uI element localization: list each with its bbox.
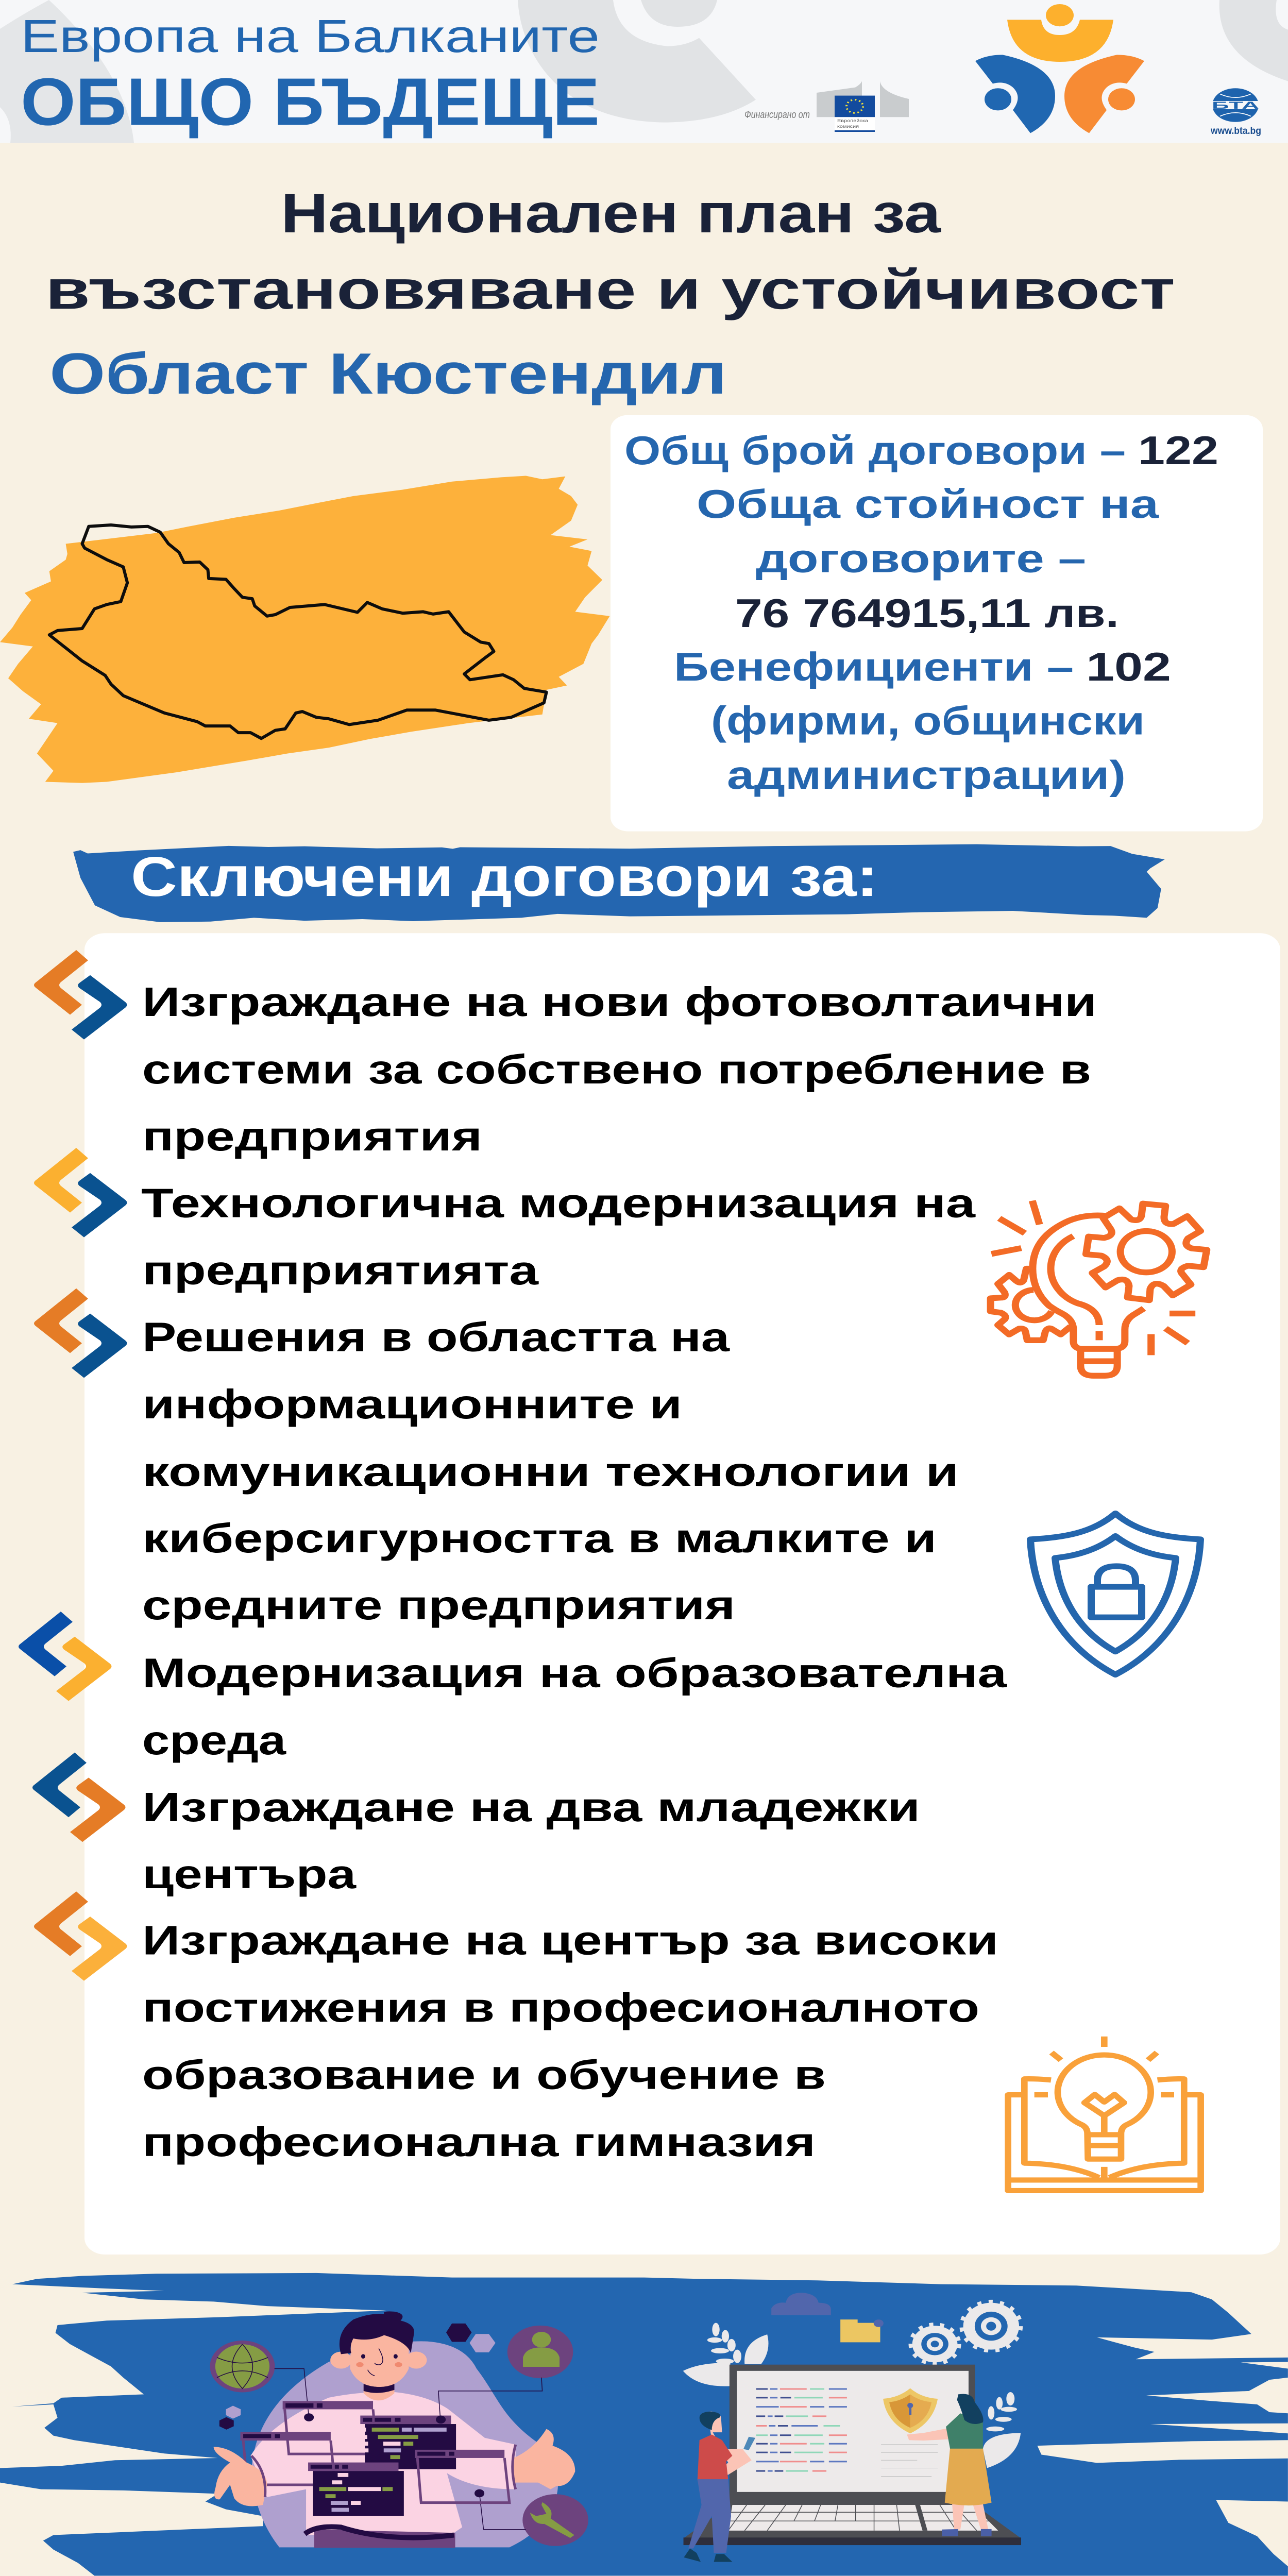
icon: book with lightbulb — [1008, 2037, 1201, 2191]
illustration: laptop security scene — [683, 2293, 1021, 2562]
stat: total value: Обща стойност на — [697, 481, 1159, 527]
logo: European Commission: Европейска — [837, 118, 869, 123]
yellow brush stroke with region map — [0, 476, 609, 783]
folder — [840, 2319, 884, 2342]
wrench node — [474, 2489, 588, 2546]
bullet icon 2 — [34, 1148, 127, 1238]
list item: ICT and cybersecurity: информационните и — [142, 1381, 682, 1427]
bullet icon 4 — [19, 1612, 111, 1701]
stat: total value: 76 764915,11 лв. — [735, 590, 1119, 636]
main title: Национален план за — [281, 182, 941, 244]
stat: beneficiaries — [674, 644, 1171, 798]
stat: total contracts: 122 — [1138, 428, 1218, 473]
window 4 — [308, 2463, 404, 2516]
bullet icon 6 — [34, 1891, 127, 1981]
list item: centre of excellence: професионална гимназия — [142, 2119, 816, 2165]
panel: contracts list — [19, 933, 1280, 2255]
stat: total contracts: Общ брой договори – — [624, 428, 1126, 473]
list item: centre of excellence: Изграждане на център за високи — [142, 1918, 998, 1963]
section banner: Сключени договори за: — [131, 846, 878, 908]
leaves — [683, 2323, 1021, 2468]
logo: European Commission: Финансирано от — [744, 109, 810, 120]
logo: European Commission — [744, 81, 909, 132]
list item: educational environment: Модернизация на образователна — [142, 1650, 1007, 1696]
region subtitle: Област Кюстендил — [49, 341, 727, 406]
main title: възстановяване и устойчивост — [45, 258, 1175, 320]
logo: BTA — [1210, 88, 1261, 136]
logo: three figures — [975, 4, 1144, 133]
list item: photovoltaic systems: системи за собствено потребление в — [142, 1047, 1091, 1093]
stat: beneficiaries: (фирми, общински — [711, 698, 1145, 743]
stat: beneficiaries: 102 — [1086, 644, 1171, 689]
shield on screen — [883, 2388, 938, 2433]
stat: beneficiaries: администрации) — [727, 753, 1126, 798]
laptop — [684, 2365, 1021, 2545]
main title — [45, 182, 1175, 320]
list item: youth centres — [142, 1785, 920, 1897]
list item: youth centres: Изграждане на два младежки — [142, 1785, 920, 1831]
stat: total value: договорите – — [756, 536, 1086, 581]
blue brush background — [0, 2273, 1288, 2575]
list item: ICT and cybersecurity: комуникационни технологии и — [142, 1449, 959, 1495]
globe node — [210, 2341, 309, 2418]
window 2 — [360, 2416, 456, 2469]
list item: centre of excellence: постижения в професионалното — [142, 1985, 979, 2031]
head and hair — [330, 2311, 427, 2400]
logo: European Commission: комисия — [837, 124, 859, 129]
list item: centre of excellence — [142, 1918, 998, 2165]
man with phone — [684, 2412, 755, 2562]
window 1 — [283, 2401, 377, 2454]
map outline — [49, 525, 547, 738]
icon: lightbulb with gears — [991, 1201, 1207, 1376]
header title: Europe on the Balkans: Европа на Балканите — [21, 10, 600, 62]
panel: contract statistics — [611, 415, 1263, 832]
sweater — [250, 2392, 516, 2535]
list item: youth centres: центъра — [142, 1851, 357, 1897]
logo: BTA: БТА — [1212, 100, 1260, 111]
list item: photovoltaic systems: предприятия — [142, 1113, 482, 1159]
list item: technological modernisation — [141, 1180, 976, 1293]
list item: photovoltaic systems: Изграждане на нови фотоволтаични — [142, 979, 1097, 1025]
bullet icon 1 — [34, 950, 127, 1040]
hands — [214, 2429, 575, 2506]
list item: technological modernisation: Технологична модернизация на — [141, 1180, 976, 1226]
hexagons — [446, 2324, 471, 2342]
user node — [438, 2326, 573, 2419]
stat: beneficiaries: Бенефициенти – — [674, 644, 1074, 689]
list item: technological modernisation: предприятията — [142, 1247, 539, 1293]
gears — [911, 2302, 1021, 2364]
list item: centre of excellence: образование и обучение в — [142, 2052, 826, 2098]
list item: ICT and cybersecurity: Решения в областта на — [142, 1314, 730, 1360]
list item: ICT and cybersecurity: киберсигурността в малките и — [142, 1515, 937, 1561]
icon: security shield — [1030, 1514, 1200, 1674]
header band — [0, 0, 1288, 143]
bullet icon 3 — [34, 1289, 127, 1378]
window 3 — [240, 2432, 335, 2485]
bullet icon 5 — [32, 1753, 126, 1842]
list item: ICT and cybersecurity — [142, 1314, 959, 1629]
list item: educational environment: среда — [142, 1717, 286, 1763]
logo: BTA: www.bta.bg — [1210, 125, 1261, 136]
illustration: developer with code windows — [210, 2311, 588, 2548]
list item: educational environment — [142, 1650, 1007, 1763]
header title: common future: ОБЩО БЪДЕЩЕ — [21, 64, 600, 140]
list item: photovoltaic systems — [142, 979, 1097, 1159]
code lines on screen — [756, 2389, 938, 2476]
section banner — [73, 844, 1165, 922]
cloud — [771, 2293, 831, 2315]
list item: ICT and cybersecurity: средните предприятия — [142, 1583, 735, 1629]
window 5 — [415, 2450, 510, 2503]
stat: total value — [697, 481, 1159, 636]
woman — [907, 2394, 992, 2536]
